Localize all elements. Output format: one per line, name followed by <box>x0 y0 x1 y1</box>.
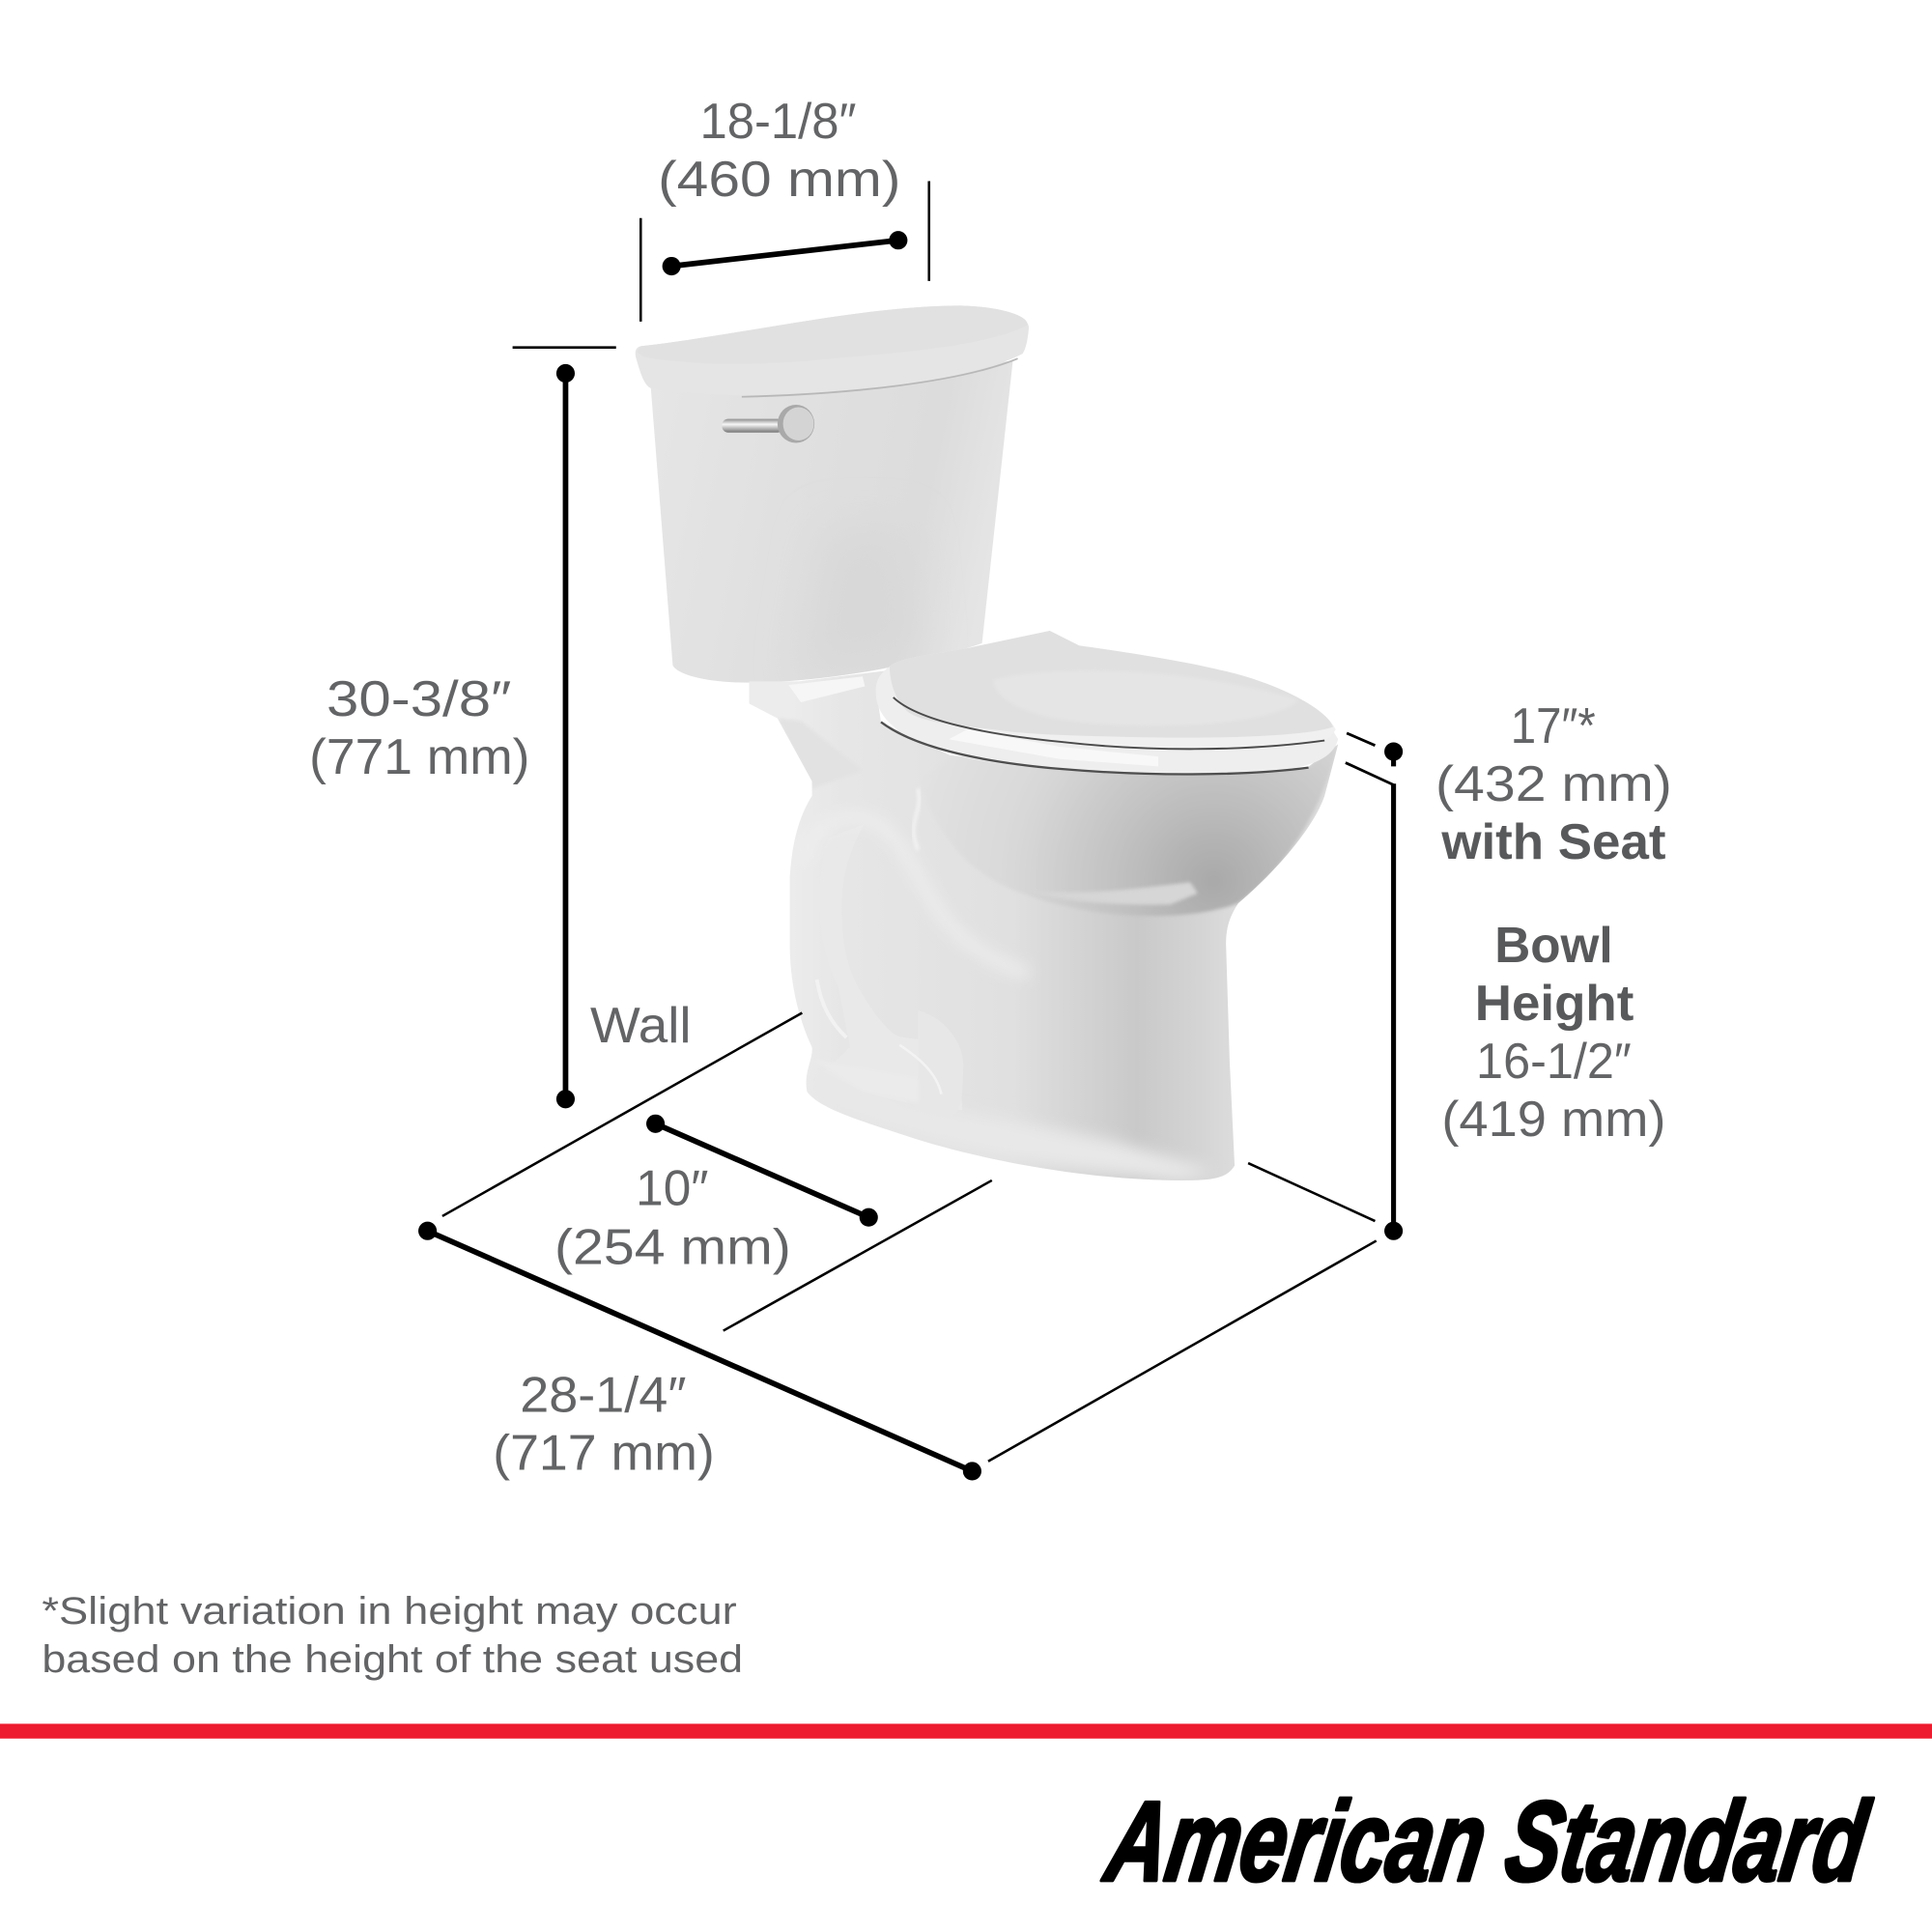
base pocket <box>894 1010 963 1117</box>
dimension: overall depth: 28-1/4″ <box>520 1368 686 1424</box>
dimension: overall depth <box>418 1222 981 1482</box>
seat lid <box>890 631 1336 750</box>
lid seam shadow <box>742 358 1018 397</box>
tank center shadow <box>801 529 918 678</box>
seat height label: 17″* <box>1511 698 1596 754</box>
toilet tank body <box>650 361 1012 683</box>
bowl height label: Bowl <box>1494 918 1613 974</box>
seat height label <box>1435 698 1672 870</box>
dimension: tank width <box>640 94 929 322</box>
dimension: overall height <box>309 348 616 1108</box>
seat ring <box>876 667 1338 773</box>
width arrow <box>663 231 907 275</box>
footnote <box>42 1590 743 1681</box>
footnote: based on the height of the seat used <box>42 1638 743 1681</box>
width label: (460 mm) <box>658 152 900 208</box>
dimension: bowl height <box>1346 733 1403 1240</box>
trapway recess <box>819 824 962 1110</box>
toilet illustration <box>636 305 1355 1195</box>
dimension: overall depth: (717 mm) <box>493 1426 715 1482</box>
neck shading <box>781 721 811 781</box>
dimension: rough-in: 10″ <box>636 1160 708 1216</box>
bowl height label: Height <box>1475 976 1634 1032</box>
lid top surface <box>890 631 1333 738</box>
flush handle <box>722 405 814 443</box>
width extension lines <box>640 182 929 322</box>
bowl lower highlight <box>1064 881 1198 906</box>
ring highlight <box>949 729 1158 766</box>
seat height label: with Seat <box>1440 814 1665 870</box>
lid inner panel <box>993 670 1298 725</box>
bottom lighter edge <box>1012 1128 1200 1180</box>
seat gap line <box>881 722 1309 775</box>
bowl shading <box>1005 752 1334 916</box>
bowl height label: 16-1/2″ <box>1476 1034 1632 1090</box>
tank lid <box>636 305 1029 396</box>
side curve highlight <box>914 788 920 850</box>
side vertical highlight <box>817 980 846 1037</box>
label: wall: Wall <box>590 998 692 1054</box>
bowl height label <box>1441 918 1665 1148</box>
width label: 18-1/8″ <box>699 94 856 150</box>
connector highlight <box>788 676 865 702</box>
lid top surface <box>637 305 1028 364</box>
toilet bowl and base <box>739 666 1355 1195</box>
width label <box>658 94 900 208</box>
floor footprint lines <box>442 1012 1377 1462</box>
footnote: *Slight variation in height may occur <box>42 1590 737 1633</box>
outer trapway loop <box>804 817 1029 974</box>
foot step <box>813 1060 918 1103</box>
lid lower edge <box>894 697 1324 749</box>
dimension: overall height: 30-3/8″ <box>327 671 511 727</box>
seat height label: (432 mm) <box>1435 756 1672 812</box>
red divider <box>0 1723 1932 1739</box>
dimension: rough-in <box>554 1115 878 1276</box>
dimension: rough-in: (254 mm) <box>554 1220 791 1276</box>
dimension: overall height: (771 mm) <box>309 729 529 785</box>
bowl height label: (419 mm) <box>1441 1092 1665 1148</box>
pocket highlight <box>899 1045 941 1094</box>
